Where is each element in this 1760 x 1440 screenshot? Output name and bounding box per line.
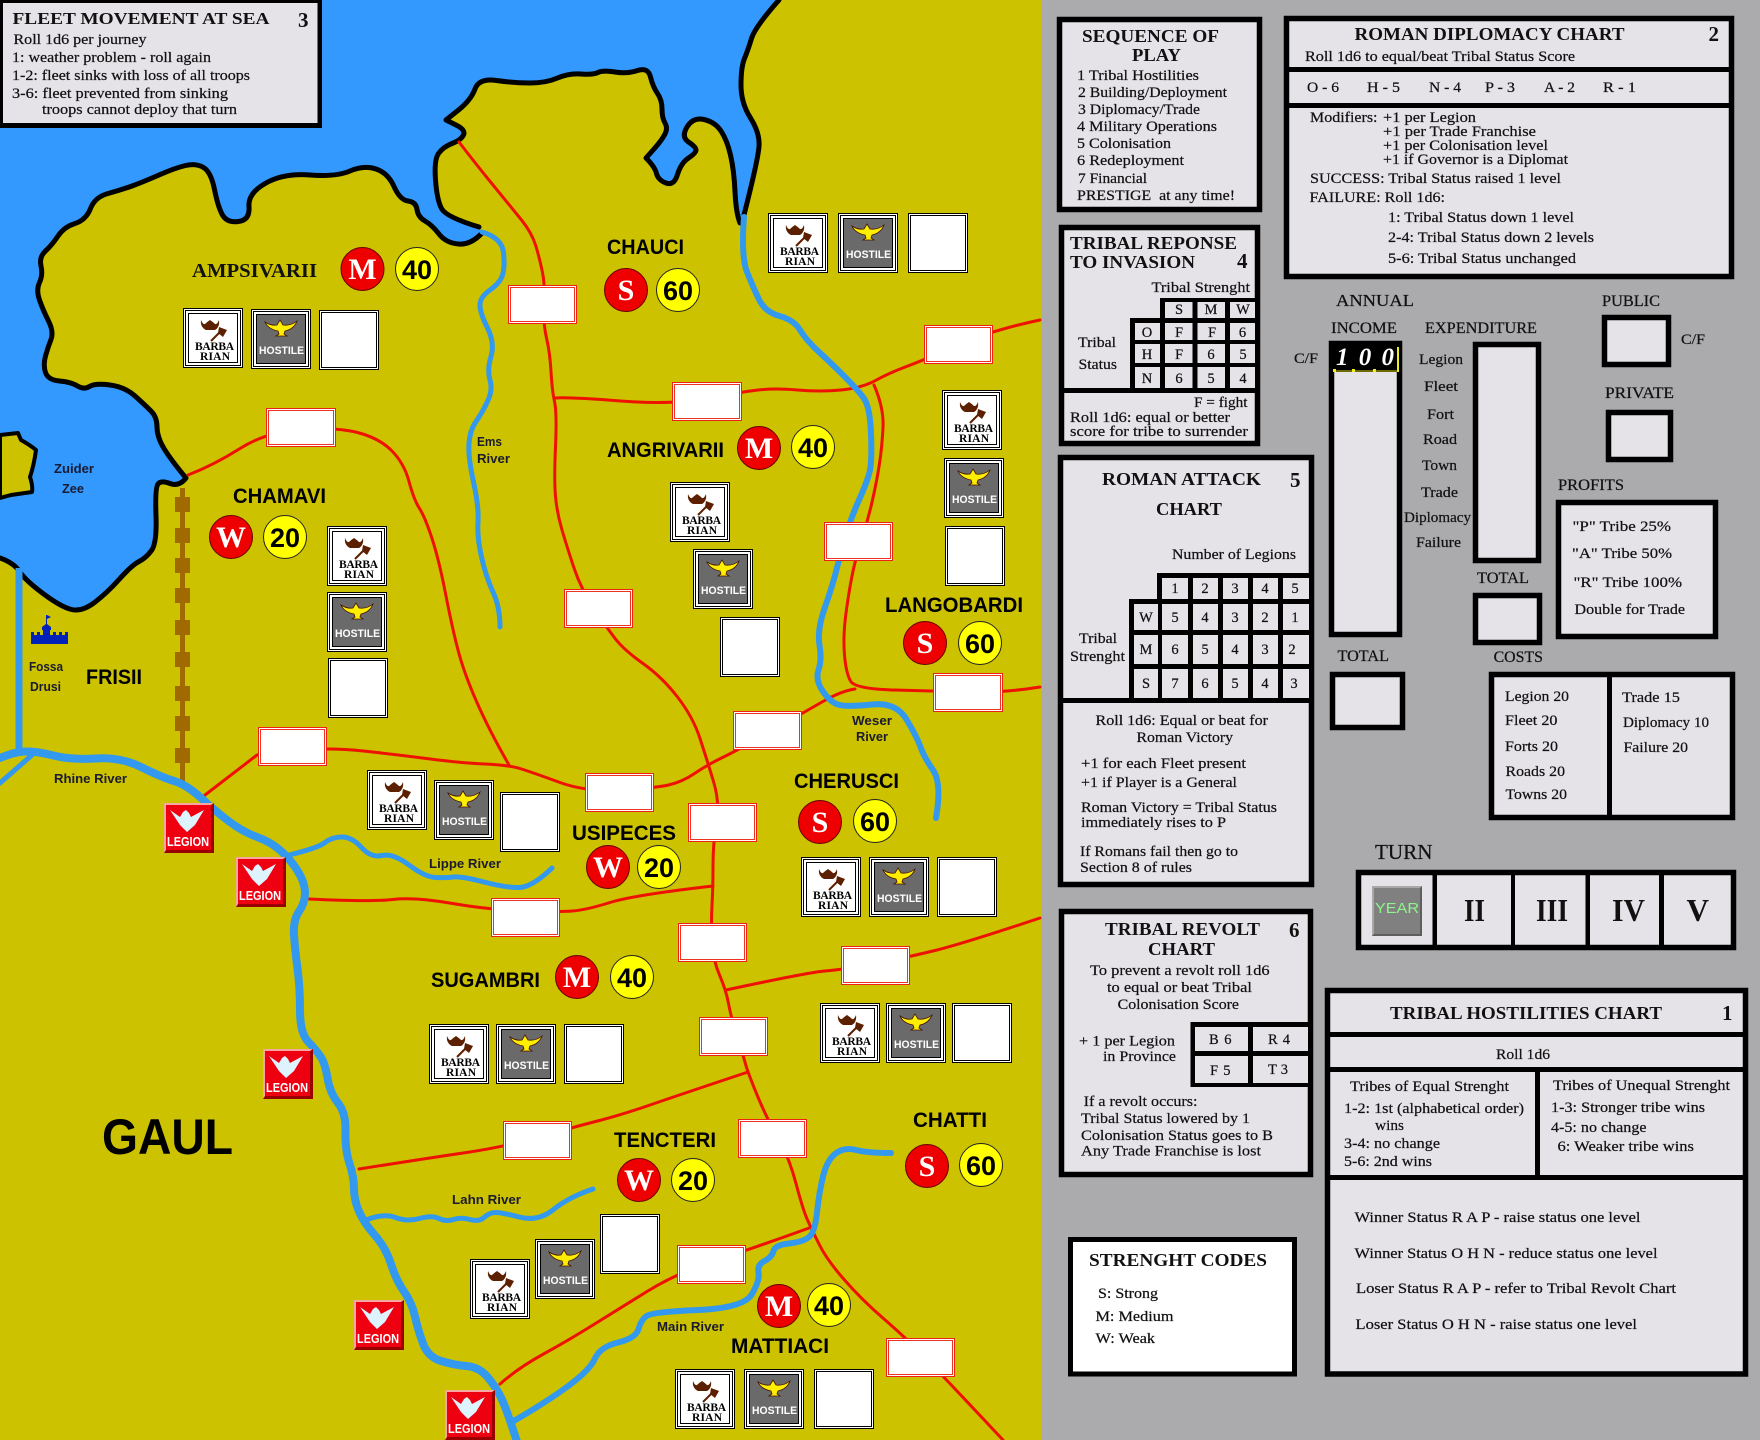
panel: turn track: II (1464, 892, 1485, 928)
panel: roman diplomacy chart: R - 1 (1603, 80, 1636, 96)
panel: sequence of play: 6 Redeployment (1077, 153, 1184, 169)
panel: costs: COSTS (1494, 649, 1543, 666)
heading: expenditure: EXPENDITURE (1425, 320, 1537, 337)
icon: fort (31, 615, 68, 644)
panel: roman diplomacy chart: 2 (1708, 22, 1719, 46)
label: carried forward income: C/F (1294, 351, 1318, 367)
region label: Frisii: FRISII (86, 666, 142, 689)
panel: fleet movement at sea: 3 (298, 8, 308, 32)
panel: roman attack chart: 2 (1261, 610, 1269, 626)
panel: tribal response to invasion: 6 (1207, 347, 1215, 363)
sea and coastline (0, 0, 779, 610)
tribe: Chatti: RIAN (837, 1046, 868, 1058)
panel: tribal revolt chart: To prevent a revolt roll 1d6 (1090, 963, 1270, 979)
tribe: Ampsivarii: HOSTILE (259, 345, 304, 357)
panel: roman diplomacy chart: +1 per Trade Franchise (1383, 124, 1536, 140)
panel: fleet movement at sea: Roll 1d6 per journey (14, 32, 147, 48)
expenditure column: Failure (1416, 535, 1461, 551)
rivers (0, 217, 938, 1440)
panel: fleet movement at sea (0, 0, 322, 128)
tribe: Mattiaci: BARBA (687, 1402, 727, 1414)
tribe: Chauci: S (618, 274, 634, 307)
panel: roman diplomacy chart: N - 4 (1429, 80, 1462, 96)
panel: roman attack chart (1060, 458, 1312, 884)
panel: roman diplomacy chart: 1: Tribal Status down 1 level (1388, 210, 1574, 226)
tribe: Chamavi: W (216, 521, 246, 554)
tribe: Chatti: HOSTILE (894, 1039, 939, 1051)
charts background (1041, 0, 1760, 1440)
panel: tribal response to invasion: S (1175, 302, 1183, 318)
panel: tribal hostilities chart: 1-2: 1st (alphabetical order) (1344, 1101, 1524, 1117)
panel: turn track: V (1686, 892, 1709, 928)
panel: sequence of play: PLAY (1132, 45, 1181, 65)
river and sea labels: Zee (62, 481, 84, 496)
tribe: Mattiaci: M (765, 1290, 793, 1323)
panel: tribal response to invasion: Tribal (1078, 335, 1116, 351)
panel: tribal hostilities chart: 1-3: Stronger tribe wins (1551, 1100, 1705, 1116)
panel: profits: PROFITS (1558, 477, 1624, 494)
panel: roman attack chart: 5 (1201, 642, 1209, 658)
panel: profits: "A" Tribe 50% (1572, 546, 1672, 562)
tribe: Sugambri: HOSTILE (504, 1060, 549, 1072)
tribe: Chauci: BARBA (780, 246, 820, 258)
tribe: Cherusci: CHERUSCI (794, 770, 899, 793)
panel: roman attack chart: Roman Victory (1136, 730, 1234, 746)
panel: roman attack chart: W (1139, 610, 1153, 626)
legion counter 2 (236, 857, 286, 907)
tribe: Angrivarii: ANGRIVARII (607, 439, 724, 462)
private treasury (1605, 385, 1674, 460)
income total: TOTAL (1338, 648, 1389, 665)
legion counter 1 (164, 803, 214, 853)
panel: tribal hostilities chart: 4-5: no change (1551, 1120, 1646, 1136)
panel: tribal revolt chart (1062, 912, 1310, 1174)
panel: tribal hostilities chart: wins (1375, 1118, 1404, 1134)
panel: tribal revolt chart: in Province (1103, 1049, 1176, 1065)
panel: tribal response to invasion: TO INVASION (1070, 252, 1195, 272)
panel: tribal hostilities chart: Winner Status R A P - raise status one level (1354, 1210, 1640, 1226)
tribe: Langobardi: 60 (965, 629, 995, 659)
panel: tribal hostilities chart: Roll 1d6 (1496, 1047, 1550, 1063)
region label: Gaul: GAUL (102, 1109, 233, 1165)
tribe: Usipeces: USIPECES (572, 822, 676, 845)
panel: roman diplomacy chart: O - 6 (1307, 80, 1339, 96)
panel: tribal hostilities chart (1328, 990, 1746, 1374)
heading: income: INCOME (1331, 320, 1397, 337)
panel: roman diplomacy chart: ROMAN DIPLOMACY CHART (1354, 24, 1624, 44)
panel: tribal response to invasion: 4 (1239, 371, 1247, 387)
panel: roman attack chart: 2 (1288, 642, 1296, 658)
panel: strength codes: M: Medium (1096, 1309, 1174, 1325)
panel: tribal response to invasion: W (1236, 302, 1250, 318)
panel: tribal revolt chart: to equal or beat Tribal (1107, 980, 1252, 996)
panel: tribal revolt chart: TRIBAL REVOLT (1105, 919, 1260, 939)
panel: tribal response to invasion: 4 (1237, 249, 1248, 273)
panel: roman diplomacy chart: A - 2 (1544, 80, 1575, 96)
panel: fleet movement at sea: 3-6: fleet prevented from sinking (12, 86, 228, 102)
panel: roman diplomacy chart: 5-6: Tribal Status unchanged (1388, 251, 1577, 267)
expenditure column: Trade (1421, 485, 1458, 501)
panel: tribal response to invasion (1062, 228, 1258, 444)
tribe: Ampsivarii: 40 (402, 255, 432, 285)
panel: turn track: TURN (1375, 840, 1432, 864)
panel: roman attack chart: 5 (1171, 610, 1179, 626)
panel: tribal revolt chart: T 3 (1268, 1062, 1288, 1078)
panel: roman attack chart: If Romans fail then go to (1080, 844, 1238, 860)
panel: roman attack chart: 4 (1201, 610, 1209, 626)
tribe: Sugambri: 40 (617, 963, 647, 993)
tribe: Tencteri: BARBA (482, 1292, 522, 1304)
public treasury: C/F (1681, 332, 1705, 348)
expenditure column: Road (1423, 432, 1458, 448)
panel: tribal response to invasion: O (1142, 325, 1152, 341)
tribe: Angrivarii: 40 (798, 433, 828, 463)
panel: tribal hostilities chart: Loser Status O H N - raise status one level (1356, 1317, 1637, 1333)
tribe: Sugambri: RIAN (446, 1067, 477, 1079)
river and sea labels: Zuider (54, 461, 94, 476)
limes frontier (175, 488, 190, 782)
tribe: Angrivarii (607, 426, 834, 676)
river and sea labels: River (856, 729, 888, 744)
river and sea labels (29, 434, 892, 1334)
panel: sequence of play: SEQUENCE OF (1082, 26, 1219, 46)
heading: annual: ANNUAL (1336, 291, 1414, 310)
panel: strength codes: W: Weak (1096, 1331, 1156, 1347)
panel: tribal revolt chart: + 1 per Legion (1079, 1034, 1176, 1050)
legion counter 3: LEGION (266, 1081, 308, 1095)
panel: roman attack chart: 5 (1291, 581, 1299, 597)
panel: roman attack chart: CHART (1156, 499, 1222, 519)
tribe: Angrivarii: BARBA (682, 515, 722, 527)
panel: tribal response to invasion: F (1175, 325, 1183, 341)
panel: roman attack chart: S (1142, 676, 1150, 692)
panel: fleet movement at sea: 1: weather problem - roll again (12, 50, 212, 66)
river and sea labels: Weser (852, 713, 892, 728)
tribe: Cherusci: 60 (860, 807, 890, 837)
river and sea labels: Fossa (29, 659, 64, 674)
panel: tribal response to invasion: F = fight (1194, 395, 1248, 411)
panel: roman attack chart: ROMAN ATTACK (1102, 469, 1261, 489)
tribe: Chatti: CHATTI (913, 1109, 987, 1132)
panel: roman attack chart: 3 (1290, 676, 1298, 692)
tribe: Usipeces (368, 770, 680, 888)
panel: costs: Failure 20 (1624, 740, 1688, 756)
panel: roman attack chart: 4 (1231, 642, 1239, 658)
panel: tribal response to invasion: Tribal Strenght (1152, 280, 1250, 296)
tribe: Sugambri: BARBA (441, 1057, 481, 1069)
tribe: Mattiaci: RIAN (692, 1412, 723, 1424)
panel: costs: Diplomacy 10 (1623, 715, 1709, 731)
panel: turn track: III (1536, 892, 1568, 928)
legion counter 4: LEGION (357, 1332, 399, 1346)
tribe: Langobardi: S (917, 627, 933, 660)
panel: tribal hostilities chart: 3-4: no change (1344, 1136, 1440, 1152)
tribe: Chatti: S (919, 1150, 935, 1183)
panel: roman attack chart: immediately rises to P (1081, 815, 1226, 831)
river and sea labels: Ems (477, 434, 502, 449)
tribe: Chamavi (210, 485, 388, 718)
tribe: Sugambri: M (563, 961, 591, 994)
tribe: Chamavi: 20 (270, 523, 300, 553)
tribe: Ampsivarii (184, 248, 438, 370)
panel: tribal response to invasion: F (1175, 347, 1183, 363)
expenditure column: Fleet (1424, 379, 1458, 395)
panel: roman diplomacy chart: Modifiers: (1310, 110, 1378, 126)
panel: tribal hostilities chart: 1 (1722, 1001, 1732, 1025)
tribe: Mattiaci (676, 1284, 874, 1428)
panel: sequence of play: PRESTIGE at any time! (1077, 188, 1235, 204)
panel: profits: Double for Trade (1574, 602, 1685, 618)
panel: roman attack chart: Strenght (1070, 649, 1125, 665)
panel: tribal hostilities chart: Loser Status R A P - refer to Tribal Revolt Chart (1356, 1281, 1676, 1297)
tribe: Chatti: BARBA (832, 1036, 872, 1048)
tribe: Cherusci: RIAN (818, 900, 849, 912)
expenditure column: Legion (1419, 352, 1464, 368)
panel: tribal response to invasion: 5 (1207, 371, 1215, 387)
tribe: Sugambri: SUGAMBRI (431, 969, 540, 992)
panel: profits (1558, 477, 1716, 636)
tribe: Cherusci: BARBA (813, 890, 853, 902)
public treasury: PUBLIC (1602, 293, 1660, 310)
river and sea labels: Drusi (30, 679, 61, 694)
tribe: Angrivarii: RIAN (687, 525, 718, 537)
panel: roman attack chart: 4 (1261, 581, 1269, 597)
tribe: Chamavi: CHAMAVI (233, 485, 326, 508)
map: land background (0, 0, 1041, 1440)
panel: sequence of play: 2 Building/Deployment (1078, 85, 1227, 101)
panel: roman diplomacy chart: +1 per Legion (1383, 110, 1477, 126)
panel: roman diplomacy chart: +1 per Colonisation level (1383, 138, 1548, 154)
panel: costs (1492, 649, 1732, 818)
panel: fleet movement at sea: troops cannot deploy that turn (42, 102, 238, 118)
panel: roman attack chart: +1 for each Fleet present (1081, 756, 1246, 772)
panel: costs: Towns 20 (1506, 787, 1567, 803)
panel: tribal response to invasion: Status (1078, 357, 1117, 373)
private treasury: PRIVATE (1605, 385, 1674, 402)
panel: tribal response to invasion: N (1142, 371, 1153, 387)
tribe: Chamavi: RIAN (344, 569, 375, 581)
tribe: Chatti (820, 1004, 1012, 1188)
year button: YEAR (1375, 900, 1419, 917)
panel: roman attack chart: 3 (1231, 581, 1239, 597)
panel: roman attack chart: +1 if Player is a General (1081, 775, 1237, 791)
expenditure column: Town (1422, 458, 1458, 474)
panel: roman diplomacy chart: +1 if Governor is a Diplomat (1383, 152, 1568, 168)
income column (1329, 341, 1402, 634)
tribe: Angrivarii: M (745, 432, 773, 465)
tribe: Mattiaci: MATTIACI (731, 1335, 829, 1358)
expenditure column: Fort (1427, 407, 1454, 423)
panel: roman attack chart: 5 (1231, 676, 1239, 692)
panel: roman attack chart: 6 (1201, 676, 1209, 692)
panel: costs: Legion 20 (1505, 689, 1569, 705)
panel: roman attack chart: M (1140, 642, 1153, 658)
panel: sequence of play: 1 Tribal Hostilities (1077, 68, 1199, 84)
panel: sequence of play: 3 Diplomacy/Trade (1078, 102, 1200, 118)
panel: roman diplomacy chart: H - 5 (1367, 80, 1400, 96)
panel: tribal hostilities chart: Winner Status O H N - reduce status one level (1354, 1246, 1658, 1262)
river and sea labels: River (477, 451, 510, 466)
panel: tribal response to invasion: score for tribe to surrender (1070, 424, 1248, 440)
panel: tribal response to invasion: F (1208, 325, 1216, 341)
panel: roman diplomacy chart: Roll 1d6 to equal/beat Tribal Status Score (1305, 49, 1575, 65)
panel: tribal revolt chart: B 6 (1209, 1032, 1232, 1048)
panel: strength codes: STRENGHT CODES (1089, 1250, 1267, 1270)
public treasury (1602, 293, 1705, 364)
legion counter 5: LEGION (448, 1422, 490, 1436)
panel: tribal revolt chart: Colonisation Status goes to B (1081, 1128, 1273, 1144)
tribe: Langobardi: RIAN (959, 433, 990, 445)
panel: roman attack chart: Number of Legions (1172, 547, 1296, 563)
tribe: Angrivarii: HOSTILE (701, 585, 746, 597)
panel: turn track (1358, 840, 1734, 948)
panel: roman attack chart: 1 (1171, 581, 1179, 597)
panel: sequence of play (1060, 20, 1260, 210)
tribe: Chauci (604, 214, 968, 312)
tribe: Chauci: CHAUCI (607, 236, 684, 259)
panel: fleet movement at sea: FLEET MOVEMENT AT SEA (12, 9, 270, 28)
panel: sequence of play: 5 Colonisation (1077, 136, 1172, 152)
tribe: Usipeces: RIAN (384, 813, 415, 825)
tribe: Sugambri (430, 956, 654, 1084)
panel: costs: Roads 20 (1506, 764, 1565, 780)
income column: 100 (1336, 344, 1394, 371)
panel: tribal response to invasion: 5 (1239, 347, 1247, 363)
panel: tribal hostilities chart: TRIBAL HOSTILITIES CHART (1390, 1003, 1662, 1023)
panel: tribal hostilities chart: Tribes of Unequal Strenght (1553, 1078, 1730, 1094)
tribe: Tencteri: RIAN (487, 1302, 518, 1314)
expenditure column (1404, 344, 1538, 560)
panel: tribal revolt chart: Any Trade Franchise is lost (1081, 1144, 1261, 1160)
tribe: Usipeces: 20 (644, 853, 674, 883)
panel: roman attack chart: 3 (1231, 610, 1239, 626)
panel: tribal revolt chart: If a revolt occurs: (1084, 1094, 1198, 1110)
panel: roman attack chart: 6 (1171, 642, 1179, 658)
tribe: Chamavi: BARBA (339, 559, 379, 571)
tribe: Mattiaci: 40 (814, 1291, 844, 1321)
tribe: Chauci: 60 (663, 276, 693, 306)
legion counter 3 (263, 1049, 313, 1099)
tribe: Mattiaci: HOSTILE (752, 1405, 797, 1417)
tribe: Langobardi: LANGOBARDI (885, 594, 1023, 617)
tribe: Ampsivarii: BARBA (195, 341, 235, 353)
tribe: Usipeces: W (593, 851, 623, 884)
panel: tribal hostilities chart: Tribes of Equal Strenght (1350, 1079, 1509, 1095)
tribe: Chauci: HOSTILE (846, 249, 891, 261)
panel: roman attack chart: Tribal (1079, 631, 1117, 647)
panel: profits: "R" Tribe 100% (1574, 575, 1682, 591)
tribe: Cherusci: S (812, 806, 828, 839)
tribe: Ampsivarii: M (348, 253, 377, 286)
panel: roman attack chart: 4 (1261, 676, 1269, 692)
panel: tribal revolt chart: F 5 (1210, 1063, 1230, 1079)
income total (1332, 648, 1402, 728)
tribe: Ampsivarii: AMPSIVARII (192, 260, 317, 282)
road network (188, 142, 1040, 1440)
panel: roman attack chart: Roman Victory = Tribal Status (1081, 800, 1277, 816)
panel: tribal revolt chart: Tribal Status lowered by 1 (1081, 1111, 1250, 1127)
expenditure column: Diplomacy (1404, 510, 1472, 526)
tribe: Tencteri: TENCTERI (614, 1129, 716, 1152)
panel: tribal response to invasion: 6 (1239, 325, 1246, 341)
panel: roman diplomacy chart (1286, 18, 1732, 276)
river and sea labels: Lahn River (452, 1192, 521, 1207)
expenditure total: TOTAL (1477, 570, 1529, 587)
panel: costs: Fleet 20 (1505, 713, 1558, 729)
panel: roman attack chart: 2 (1201, 581, 1209, 597)
river and sea labels: Lippe River (429, 856, 501, 871)
tribe: Chatti: 60 (966, 1151, 996, 1181)
panel: tribal revolt chart: R 4 (1268, 1032, 1291, 1048)
panel: roman diplomacy chart: 2-4: Tribal Status down 2 levels (1388, 230, 1594, 246)
tribe: Tencteri: HOSTILE (543, 1275, 588, 1287)
panel: tribal response to invasion: 6 (1175, 371, 1183, 387)
panel: tribal revolt chart: 6 (1289, 918, 1300, 942)
river and sea labels: Main River (657, 1319, 724, 1334)
panel: profits: "P" Tribe 25% (1572, 519, 1671, 535)
tribe: Chauci: RIAN (785, 256, 816, 268)
panel: tribal response to invasion: H (1142, 347, 1153, 363)
panel: tribal revolt chart: Colonisation Score (1118, 997, 1239, 1013)
tribe: Cherusci (794, 770, 996, 916)
tribe: Langobardi (885, 390, 1023, 664)
panel: sequence of play: 7 Financial (1078, 171, 1147, 187)
panel: turn track: IV (1612, 892, 1645, 928)
tribe: Langobardi: BARBA (954, 423, 994, 435)
panel: costs: Trade 15 (1622, 690, 1680, 706)
panel: tribal response to invasion: M (1205, 302, 1218, 318)
panel: tribal hostilities chart: 5-6: 2nd wins (1344, 1154, 1432, 1170)
panel: strength codes (1070, 1240, 1294, 1374)
panel: roman attack chart: 3 (1261, 642, 1269, 658)
panel: roman attack chart: Roll 1d6: Equal or beat for (1096, 713, 1268, 729)
tribe: Cherusci: HOSTILE (877, 893, 922, 905)
panel: tribal response to invasion: TRIBAL REPONSE (1070, 233, 1237, 253)
panel: roman diplomacy chart: FAILURE: Roll 1d6: (1310, 190, 1445, 206)
legion counter 1: LEGION (167, 835, 209, 849)
panel: tribal revolt chart: CHART (1148, 939, 1215, 959)
panel: roman diplomacy chart: SUCCESS: Tribal Status raised 1 level (1310, 171, 1561, 187)
tribe: Tencteri: 20 (678, 1166, 708, 1196)
panel: roman diplomacy chart: P - 3 (1485, 80, 1515, 96)
panel: roman attack chart: Section 8 of rules (1080, 860, 1192, 876)
tribe: Ampsivarii: RIAN (200, 351, 231, 363)
panel: sequence of play: 4 Military Operations (1077, 119, 1217, 135)
road boxes (258, 286, 1002, 1376)
year button (1372, 886, 1422, 936)
expenditure total (1476, 570, 1540, 642)
legion counter 2: LEGION (239, 889, 281, 903)
tribe: Tencteri: W (624, 1164, 654, 1197)
panel: costs: Forts 20 (1505, 739, 1558, 755)
panel: tribal response to invasion: Roll 1d6: equal or better (1070, 410, 1230, 426)
panel: roman attack chart: 5 (1290, 468, 1300, 492)
panel: roman attack chart: 1 (1291, 610, 1299, 626)
panel: tribal hostilities chart: 6: Weaker tribe wins (1558, 1139, 1694, 1155)
legion counter 5 (445, 1390, 495, 1440)
legion counter 4 (354, 1300, 404, 1350)
tribe: Usipeces: BARBA (379, 803, 419, 815)
panel: roman attack chart: 7 (1171, 676, 1179, 692)
panel: strength codes: S: Strong (1098, 1286, 1158, 1302)
tribe: Tencteri (470, 1129, 716, 1318)
panel: fleet movement at sea: 1-2: fleet sinks with loss of all troops (12, 68, 250, 84)
tribe: Chamavi: HOSTILE (335, 628, 380, 640)
river and sea labels: Rhine River (54, 771, 127, 786)
tribe: Usipeces: HOSTILE (442, 816, 487, 828)
tribe: Langobardi: HOSTILE (952, 494, 997, 506)
